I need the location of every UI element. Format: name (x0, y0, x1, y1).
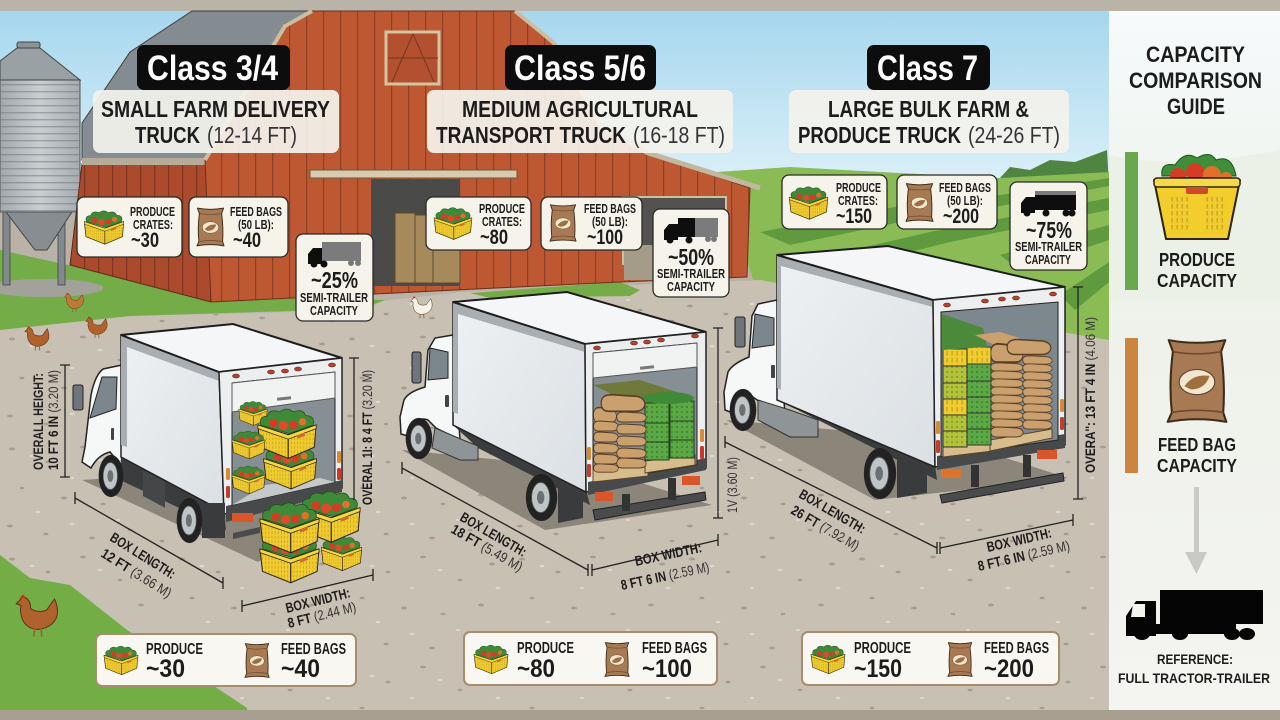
subtitle: small farm delivery truck: TRUCK (135, 122, 200, 148)
subtitle: large bulk farm and produce truck: (24-26 FT) (968, 122, 1060, 148)
card: truck 2 semi-trailer share (653, 209, 729, 297)
produce capacity label (1157, 250, 1237, 291)
card: truck 2 semi-trailer share: SEMI-TRAILER (657, 266, 725, 281)
side lights (936, 399, 1064, 453)
card: truck 3 produce crates: ~150 (836, 205, 872, 228)
guide title (1129, 42, 1262, 119)
cab (400, 335, 460, 440)
side wall (70, 164, 211, 302)
truck 1 (73, 324, 362, 583)
feed bag capacity label (1157, 435, 1237, 476)
cab (724, 300, 785, 415)
summary card: truck 3: ~200 (984, 655, 1034, 683)
dimension labels: truck 1: BOX WIDTH: (284, 584, 352, 616)
card: truck 1 produce crates: PRODUCE (130, 204, 175, 219)
roll door (232, 372, 335, 412)
rear frame (585, 332, 706, 492)
card: truck 3 semi-trailer share: CAPACITY (1025, 252, 1071, 267)
card: truck 3 produce crates (782, 175, 887, 229)
barn (70, 11, 760, 302)
side lights (587, 429, 704, 477)
guide title: CAPACITY (1146, 42, 1245, 67)
marker lights (594, 334, 698, 350)
arrow to reference truck (1185, 487, 1207, 574)
dimension labels: truck 3: BOX WIDTH: (985, 524, 1053, 555)
guide title: GUIDE (1167, 94, 1225, 119)
card: truck 2 produce crates: ~80 (480, 226, 508, 249)
heading: class 7: Class 7 (877, 49, 978, 88)
dimension labels: truck 1: 12 FT (3.66 M) (98, 545, 175, 601)
summary card: truck 3: ~150 (854, 655, 902, 683)
roll door (593, 343, 697, 378)
cab (82, 365, 125, 470)
heading: class 3/4: Class 3/4 (147, 49, 278, 88)
cargo opening (941, 302, 1058, 457)
card: truck 1 semi-trailer share: ~25% (311, 267, 358, 293)
icon: full tractor-trailer (1126, 590, 1263, 640)
subtitle: medium agricultural transport truck: TRANSPORT TRUCK (436, 122, 626, 148)
grass strip by truck 2 (470, 282, 640, 298)
card: truck 3 semi-trailer share (1010, 182, 1087, 270)
card: truck 3 feed bags (897, 175, 997, 229)
feed bag capacity label: FEED BAG (1158, 435, 1236, 455)
cargo floor (232, 478, 335, 505)
card: truck 3 feed bags: (50 LB): (947, 193, 983, 208)
roof (777, 246, 1065, 300)
dimension labels: truck 3: OVERA'': 13 FT 4 IN (4.06 M) (1082, 317, 1098, 473)
card: truck 3 semi-trailer share: ~75% (1026, 217, 1072, 243)
card: truck 2 produce crates (426, 197, 531, 250)
summary card: truck 3: PRODUCE (854, 640, 911, 657)
subtitle: small farm delivery truck: (12-14 FT) (207, 122, 297, 148)
dimension labels: truck 3: 26 FT (7.92 M) (788, 502, 862, 554)
wheels and bumper (730, 389, 756, 431)
produce capacity label: CAPACITY (1157, 271, 1237, 291)
reference label (1118, 651, 1270, 686)
card: truck 2 feed bags: FEED BAGS (584, 201, 636, 216)
subtitle: large bulk farm and produce truck: LARGE BULK FARM & (828, 96, 1029, 122)
card: truck 1 produce crates: ~30 (131, 229, 159, 252)
cargo (942, 314, 1052, 457)
dimension labels: truck 1: OVERAL 1I: 8 4 FT (3.20 M) (359, 370, 375, 505)
truck 3 (724, 246, 1068, 503)
card: truck 1 semi-trailer share (296, 234, 373, 321)
roof (121, 324, 342, 372)
card: truck 3 feed bags: ~200 (943, 205, 979, 228)
farm fields (717, 150, 1109, 345)
dimension labels: truck 3 (788, 317, 1098, 574)
stacked boxes (395, 213, 460, 283)
dimension labels: truck 3: BOX LENGTH: (796, 486, 869, 537)
chassis (777, 400, 937, 480)
guide title: COMPARISON (1129, 68, 1262, 93)
side lights (226, 451, 341, 498)
icon: feed bag (1168, 340, 1226, 422)
front wall (205, 11, 750, 302)
summary card: truck 2: PRODUCE (517, 640, 574, 657)
top band (0, 0, 1280, 11)
gable trim (205, 11, 600, 160)
orange feed bar (1125, 338, 1138, 473)
marker lights (232, 363, 336, 378)
shed opening (623, 197, 726, 264)
chickens (16, 292, 432, 637)
card: truck 3 produce crates: CRATES: (838, 193, 878, 208)
rear frame (933, 287, 1065, 467)
barn door opening (371, 179, 460, 286)
stacked crates outside (260, 491, 362, 583)
card: truck 3 feed bags: FEED BAGS (939, 180, 991, 195)
cargo opening (593, 343, 697, 482)
dimension labels: truck 2: BOX WIDTH: (633, 539, 703, 569)
card: truck 1 semi-trailer share: CAPACITY (310, 303, 358, 318)
sky (0, 11, 1110, 186)
rear frame (219, 358, 342, 514)
card: truck 1 feed bags: FEED BAGS (230, 204, 282, 219)
summary card: truck 2 (464, 632, 717, 685)
truck 2 (400, 292, 712, 530)
feed bag capacity label: CAPACITY (1157, 456, 1237, 476)
eave trim (82, 158, 207, 165)
summary card: truck 1: PRODUCE (146, 641, 203, 658)
subtitle: medium agricultural transport truck: MEDIUM AGRICULTURAL (462, 96, 698, 122)
marker lights (944, 292, 1056, 307)
side panel of box (777, 255, 935, 467)
door beam (310, 170, 517, 178)
card: truck 3 semi-trailer share: SEMI-TRAILER (1015, 239, 1082, 254)
subtitle: large bulk farm and produce truck: PRODUCE TRUCK (798, 122, 961, 148)
dimension labels: truck 2: BOX LENGTH: (458, 509, 530, 560)
bottom band (0, 710, 1280, 720)
reference label: REFERENCE: (1157, 651, 1233, 667)
crates inside (232, 401, 316, 494)
summary card: truck 1: FEED BAGS (281, 641, 346, 658)
card: truck 2 feed bags: ~100 (587, 226, 623, 249)
grass by barn (0, 250, 385, 330)
subtitle: medium agricultural transport truck (427, 90, 733, 153)
summary card: truck 1 (96, 634, 356, 686)
card: truck 1 semi-trailer share: SEMI-TRAILER (300, 290, 368, 305)
step and tank (758, 400, 818, 437)
card: truck 1 feed bags: (50 LB): (238, 217, 274, 232)
silo (0, 42, 103, 297)
cargo (593, 380, 695, 482)
summary card: truck 2: ~80 (517, 655, 555, 683)
chassis (120, 455, 226, 530)
summary card: truck 3: FEED BAGS (984, 640, 1049, 657)
card: truck 2 produce crates: PRODUCE (479, 201, 525, 216)
loft window (386, 32, 439, 84)
card: truck 2 semi-trailer share: ~50% (668, 244, 714, 270)
subtitle: small farm delivery truck (93, 90, 339, 153)
card: truck 1 feed bags: ~40 (233, 229, 261, 252)
dimension labels: truck 1: BOX LENGTH: (107, 529, 179, 582)
summary card: truck 2: ~100 (642, 655, 692, 683)
wheels and bumper (406, 418, 432, 459)
dimension labels: truck 2: 1V (3.60 M) (724, 457, 740, 513)
subtitle: medium agricultural transport truck: (16-18 FT) (633, 122, 725, 148)
summary card: truck 2: FEED BAGS (642, 640, 707, 657)
summary card: truck 1: ~30 (146, 655, 185, 683)
chassis (453, 425, 590, 505)
icon: produce basket (1154, 154, 1240, 239)
gravel ground (0, 280, 1109, 710)
card: truck 3 produce crates: PRODUCE (836, 180, 881, 195)
subtitle: large bulk farm and produce truck (789, 90, 1069, 153)
card: truck 2 produce crates: CRATES: (482, 214, 522, 229)
dimension labels: truck 3: 8 FT 6 IN (2.59 M) (976, 537, 1071, 574)
card: truck 2 feed bags: (50 LB): (592, 214, 628, 229)
card: truck 2 semi-trailer share: CAPACITY (667, 279, 715, 294)
card: truck 1 produce crates: CRATES: (133, 217, 173, 232)
step and tank (432, 428, 478, 460)
dimension labels: truck 1: 10 FT 6 IN (3.20 M) (45, 370, 61, 470)
dimension labels: truck 1 (30, 370, 375, 631)
summary card: truck 1: ~40 (281, 655, 320, 683)
side panel of box (453, 302, 586, 492)
dimension labels: truck 2: 18 FT (5.49 M) (448, 521, 526, 575)
roof left (82, 11, 312, 160)
dimension labels: truck 1: 8 FT (2.44 M) (286, 598, 358, 631)
roof (453, 292, 706, 344)
dimension labels: truck 2 (448, 457, 740, 593)
card: truck 2 feed bags (541, 197, 642, 250)
side panel of box (121, 335, 224, 512)
dimension labels: truck 2: 8 FT 6 IN (2.59 M) (619, 559, 711, 593)
cargo opening (232, 372, 335, 505)
grass corner (0, 555, 247, 710)
subtitle: small farm delivery truck: SMALL FARM DELIVERY (101, 96, 330, 122)
heading: class 5/6: Class 5/6 (514, 49, 646, 88)
card: truck 1 feed bags (189, 197, 288, 257)
produce capacity label: PRODUCE (1159, 250, 1235, 270)
card: truck 1 produce crates (77, 197, 182, 257)
green produce bar (1125, 152, 1138, 290)
shed roof trim (600, 125, 760, 188)
dimension lines (60, 287, 1083, 612)
panel: capacity comparison guide (1109, 11, 1280, 710)
dimension labels: truck 1: OVERALL HEIGHT: (30, 373, 46, 470)
wheels (99, 455, 123, 497)
shed opening floor (624, 245, 725, 280)
summary card: truck 3 (802, 632, 1059, 685)
